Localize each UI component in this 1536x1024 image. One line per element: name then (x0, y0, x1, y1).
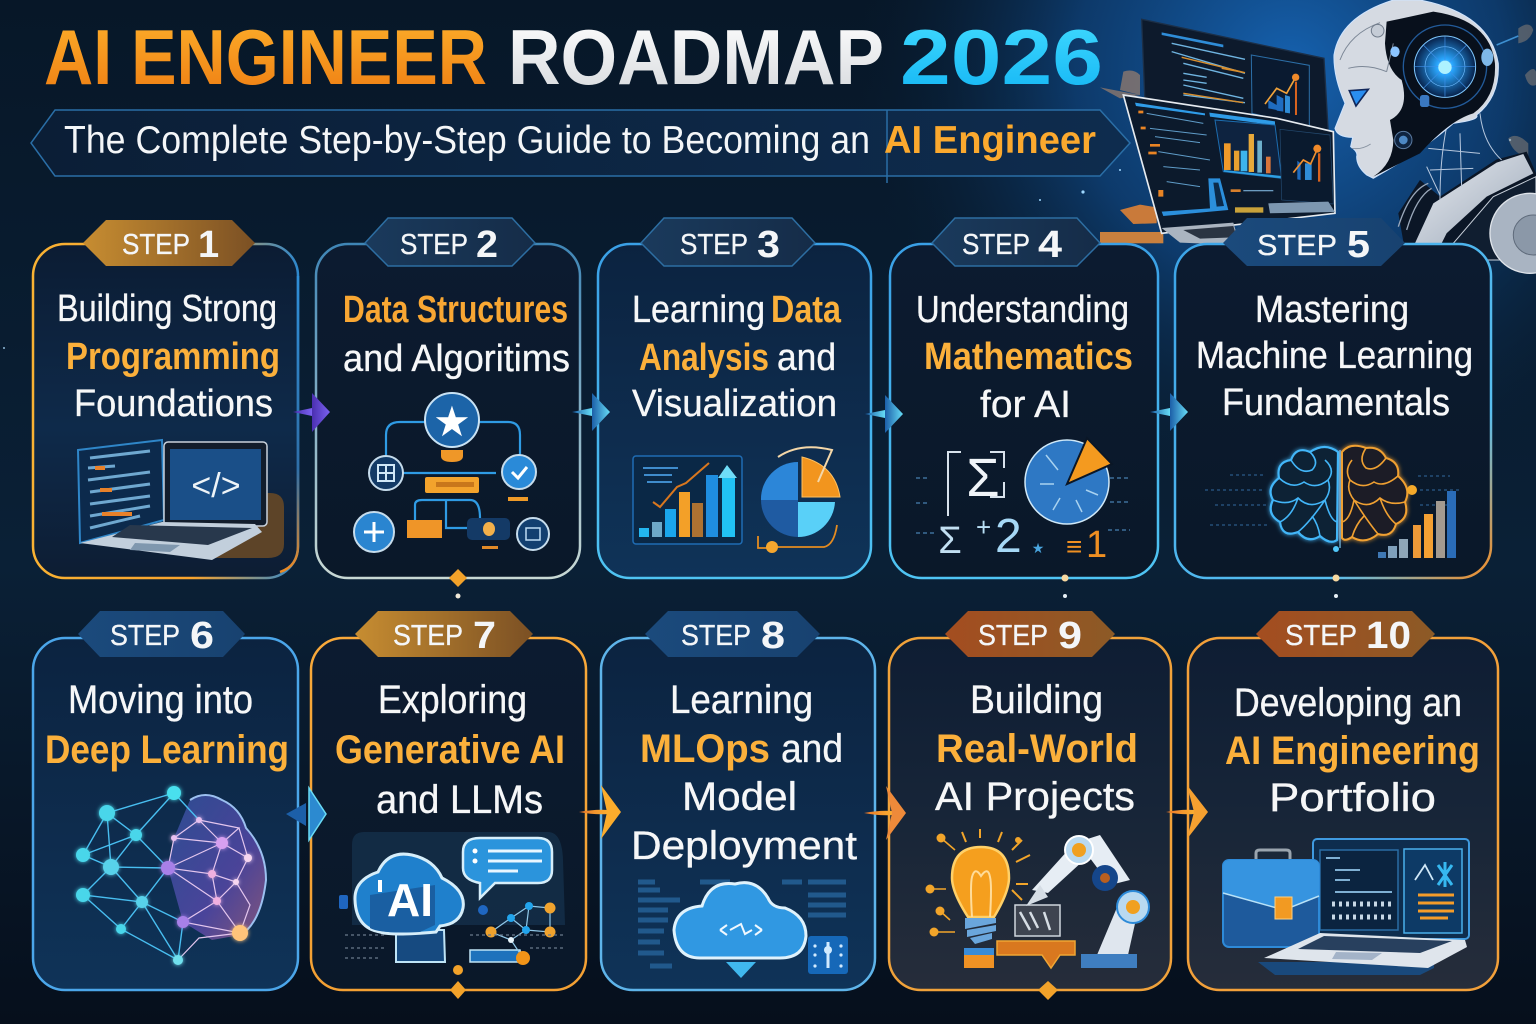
icon: math symbols: ≡ (1066, 531, 1082, 562)
subtitle banner: The Complete Step-by-Step Guide to Becoming an (64, 119, 870, 162)
badge: step 4: 4 (1038, 224, 1062, 266)
panel: step 6 (33, 611, 298, 990)
icon: math symbols: Σ (966, 448, 1000, 508)
badge: step 10 (1256, 611, 1435, 657)
heading: step 2 (343, 289, 570, 380)
title: 2026 (900, 13, 1103, 101)
heading: step 7 (335, 678, 565, 822)
badge: step 5 (1223, 218, 1405, 266)
back monitor (1142, 19, 1328, 133)
icon: glowing brain with bars (1205, 446, 1460, 558)
heading: step 9: Real-World (936, 727, 1138, 771)
illustration: laptops and AI robot (1100, 0, 1536, 273)
icon: light bulb (926, 829, 1030, 968)
icon: data structure tree (354, 393, 549, 552)
heading: step 10: AI Engineering (1225, 729, 1480, 773)
badge: step 5: 5 (1347, 224, 1370, 266)
heading: step 8: and (781, 727, 843, 771)
icon: math symbols: 1 (1086, 524, 1107, 566)
heading: step 7: Generative AI (335, 728, 565, 772)
arrow: step 9 to 10 (1166, 785, 1208, 839)
heading: step 8 (631, 678, 857, 868)
heading: step 7: Exploring (378, 678, 527, 722)
badge: step 7 (355, 611, 533, 657)
heading: step 3: Learning (632, 289, 765, 331)
connector: top row nodes (449, 569, 1340, 598)
heading: step 4: for AI (980, 384, 1071, 426)
heading: step 5: Fundamentals (1222, 382, 1450, 424)
subtitle banner: AI Engineer (884, 119, 1096, 162)
heading: step 1: Foundations (74, 383, 273, 425)
icon: pie chart (758, 447, 840, 553)
arrow: step 8 to 9 (864, 786, 906, 840)
icon: bar chart (633, 456, 742, 544)
heading: step 10: Portfolio (1269, 776, 1436, 820)
title (44, 13, 1103, 101)
robot head (1334, 0, 1498, 178)
heading: step 10 (1225, 681, 1480, 820)
arrow: step 1 to 2 (293, 393, 330, 432)
badge: step 4 (932, 218, 1100, 266)
badge: step 4: STEP (962, 229, 1030, 261)
heading: step 2: Data Structures (343, 289, 568, 331)
heading: step 3: Analysis (639, 337, 769, 379)
badge: step 6: STEP (110, 620, 180, 652)
arrow: step 7 to 8 (579, 785, 621, 839)
badge: step 10: 10 (1366, 615, 1411, 657)
icon: robotic arm (997, 835, 1149, 968)
arrow: step 3 to 4 (865, 395, 903, 433)
icon: cloud deployment (638, 882, 848, 978)
arrow: step 2 to 3 (572, 393, 610, 431)
panel: step 8 (601, 611, 875, 990)
icon: neural network brain (76, 786, 266, 965)
icon: math symbols: Σ (938, 520, 962, 562)
badge: step 2 (365, 218, 535, 266)
heading: step 3: and (777, 337, 836, 379)
heading: step 5: Machine Learning (1196, 335, 1473, 377)
badge: step 8: 8 (761, 615, 785, 657)
heading: step 4: Mathematics (924, 336, 1133, 378)
connector: bottom row nodes (450, 965, 1058, 1000)
icon: portfolio briefcase and laptop (1223, 839, 1469, 975)
icon: pie chart gauge (1025, 438, 1112, 524)
panel: step 4 (890, 218, 1158, 578)
icon: laptop with code (78, 440, 284, 560)
badge: step 1: 1 (198, 224, 219, 266)
icon: laptop with code: </> (191, 467, 241, 505)
icon: math symbols (916, 448, 1130, 566)
badge: step 9 (945, 611, 1115, 657)
heading: step 10: Developing an (1234, 681, 1462, 725)
decorative desk blocks (1100, 25, 1536, 243)
heading: step 2: and Algoritims (343, 338, 570, 380)
icon: math symbols: 2 (995, 510, 1022, 563)
badge: step 1: STEP (122, 229, 190, 261)
badge: step 8 (645, 611, 820, 657)
heading: step 6: Moving into (68, 678, 253, 722)
icon: AI cloud and chat (339, 832, 565, 965)
heading: step 8: Learning (670, 678, 813, 722)
heading: step 3 (632, 289, 842, 425)
heading: step 6 (45, 678, 289, 772)
panel: step 10 (1188, 611, 1498, 990)
heading: step 3: Visualization (632, 383, 837, 425)
heading: step 5 (1196, 289, 1473, 424)
badge: step 7: STEP (393, 620, 463, 652)
heading: step 3: Data (771, 289, 842, 331)
heading: step 1: Building Strong (57, 288, 277, 330)
heading: step 9 (935, 678, 1138, 819)
heading: step 6: Deep Learning (45, 728, 289, 772)
panel: step 2 (316, 218, 580, 578)
heading: step 7: and LLMs (376, 778, 543, 822)
heading: step 1: Programming (66, 336, 280, 378)
title: AI ENGINEER (44, 13, 487, 101)
heading: step 9: AI Projects (935, 775, 1135, 819)
heading: step 8: MLOps (640, 727, 770, 771)
icon: math symbols: ★ (1032, 540, 1044, 556)
panel: step 5 (1175, 218, 1491, 578)
heading: step 1 (57, 288, 280, 425)
panel: step 9 (889, 611, 1171, 990)
robot body (1398, 113, 1536, 273)
badge: step 1 (83, 220, 255, 266)
badge: step 10: STEP (1285, 620, 1357, 652)
title: ROADMAP (508, 13, 884, 101)
badge: step 2: STEP (400, 229, 468, 261)
icon: AI cloud and chat: AI (387, 874, 433, 926)
front laptop (1123, 95, 1335, 245)
heading: step 8: Model (682, 775, 797, 819)
badge: step 6: 6 (190, 615, 214, 657)
heading: step 4 (916, 289, 1133, 426)
heading: step 5: Mastering (1255, 289, 1409, 331)
badge: step 3 (641, 218, 815, 266)
panel: step 7 (311, 611, 586, 990)
heading: step 4: Understanding (916, 289, 1129, 331)
badge: step 3: 3 (757, 224, 780, 266)
arrow: step 6 to 7 (286, 788, 326, 840)
icon: math symbols: + (976, 512, 991, 542)
heading: step 9: Building (970, 678, 1103, 722)
badge: step 9: STEP (978, 620, 1048, 652)
badge: step 9: 9 (1058, 615, 1082, 657)
icon: data structure tree: ★ (433, 398, 471, 445)
panel: step 1 (33, 220, 298, 578)
badge: step 6 (78, 611, 245, 657)
badge: step 7: 7 (473, 615, 496, 657)
badge: step 8: STEP (681, 620, 751, 652)
badge: step 2: 2 (476, 224, 498, 266)
panel: step 3 (598, 218, 871, 578)
badge: step 5: STEP (1257, 230, 1337, 262)
heading: step 8: Deployment (631, 824, 857, 868)
arrow: step 4 to 5 (1150, 393, 1188, 431)
badge: step 3: STEP (680, 229, 748, 261)
subtitle banner (31, 110, 1130, 183)
